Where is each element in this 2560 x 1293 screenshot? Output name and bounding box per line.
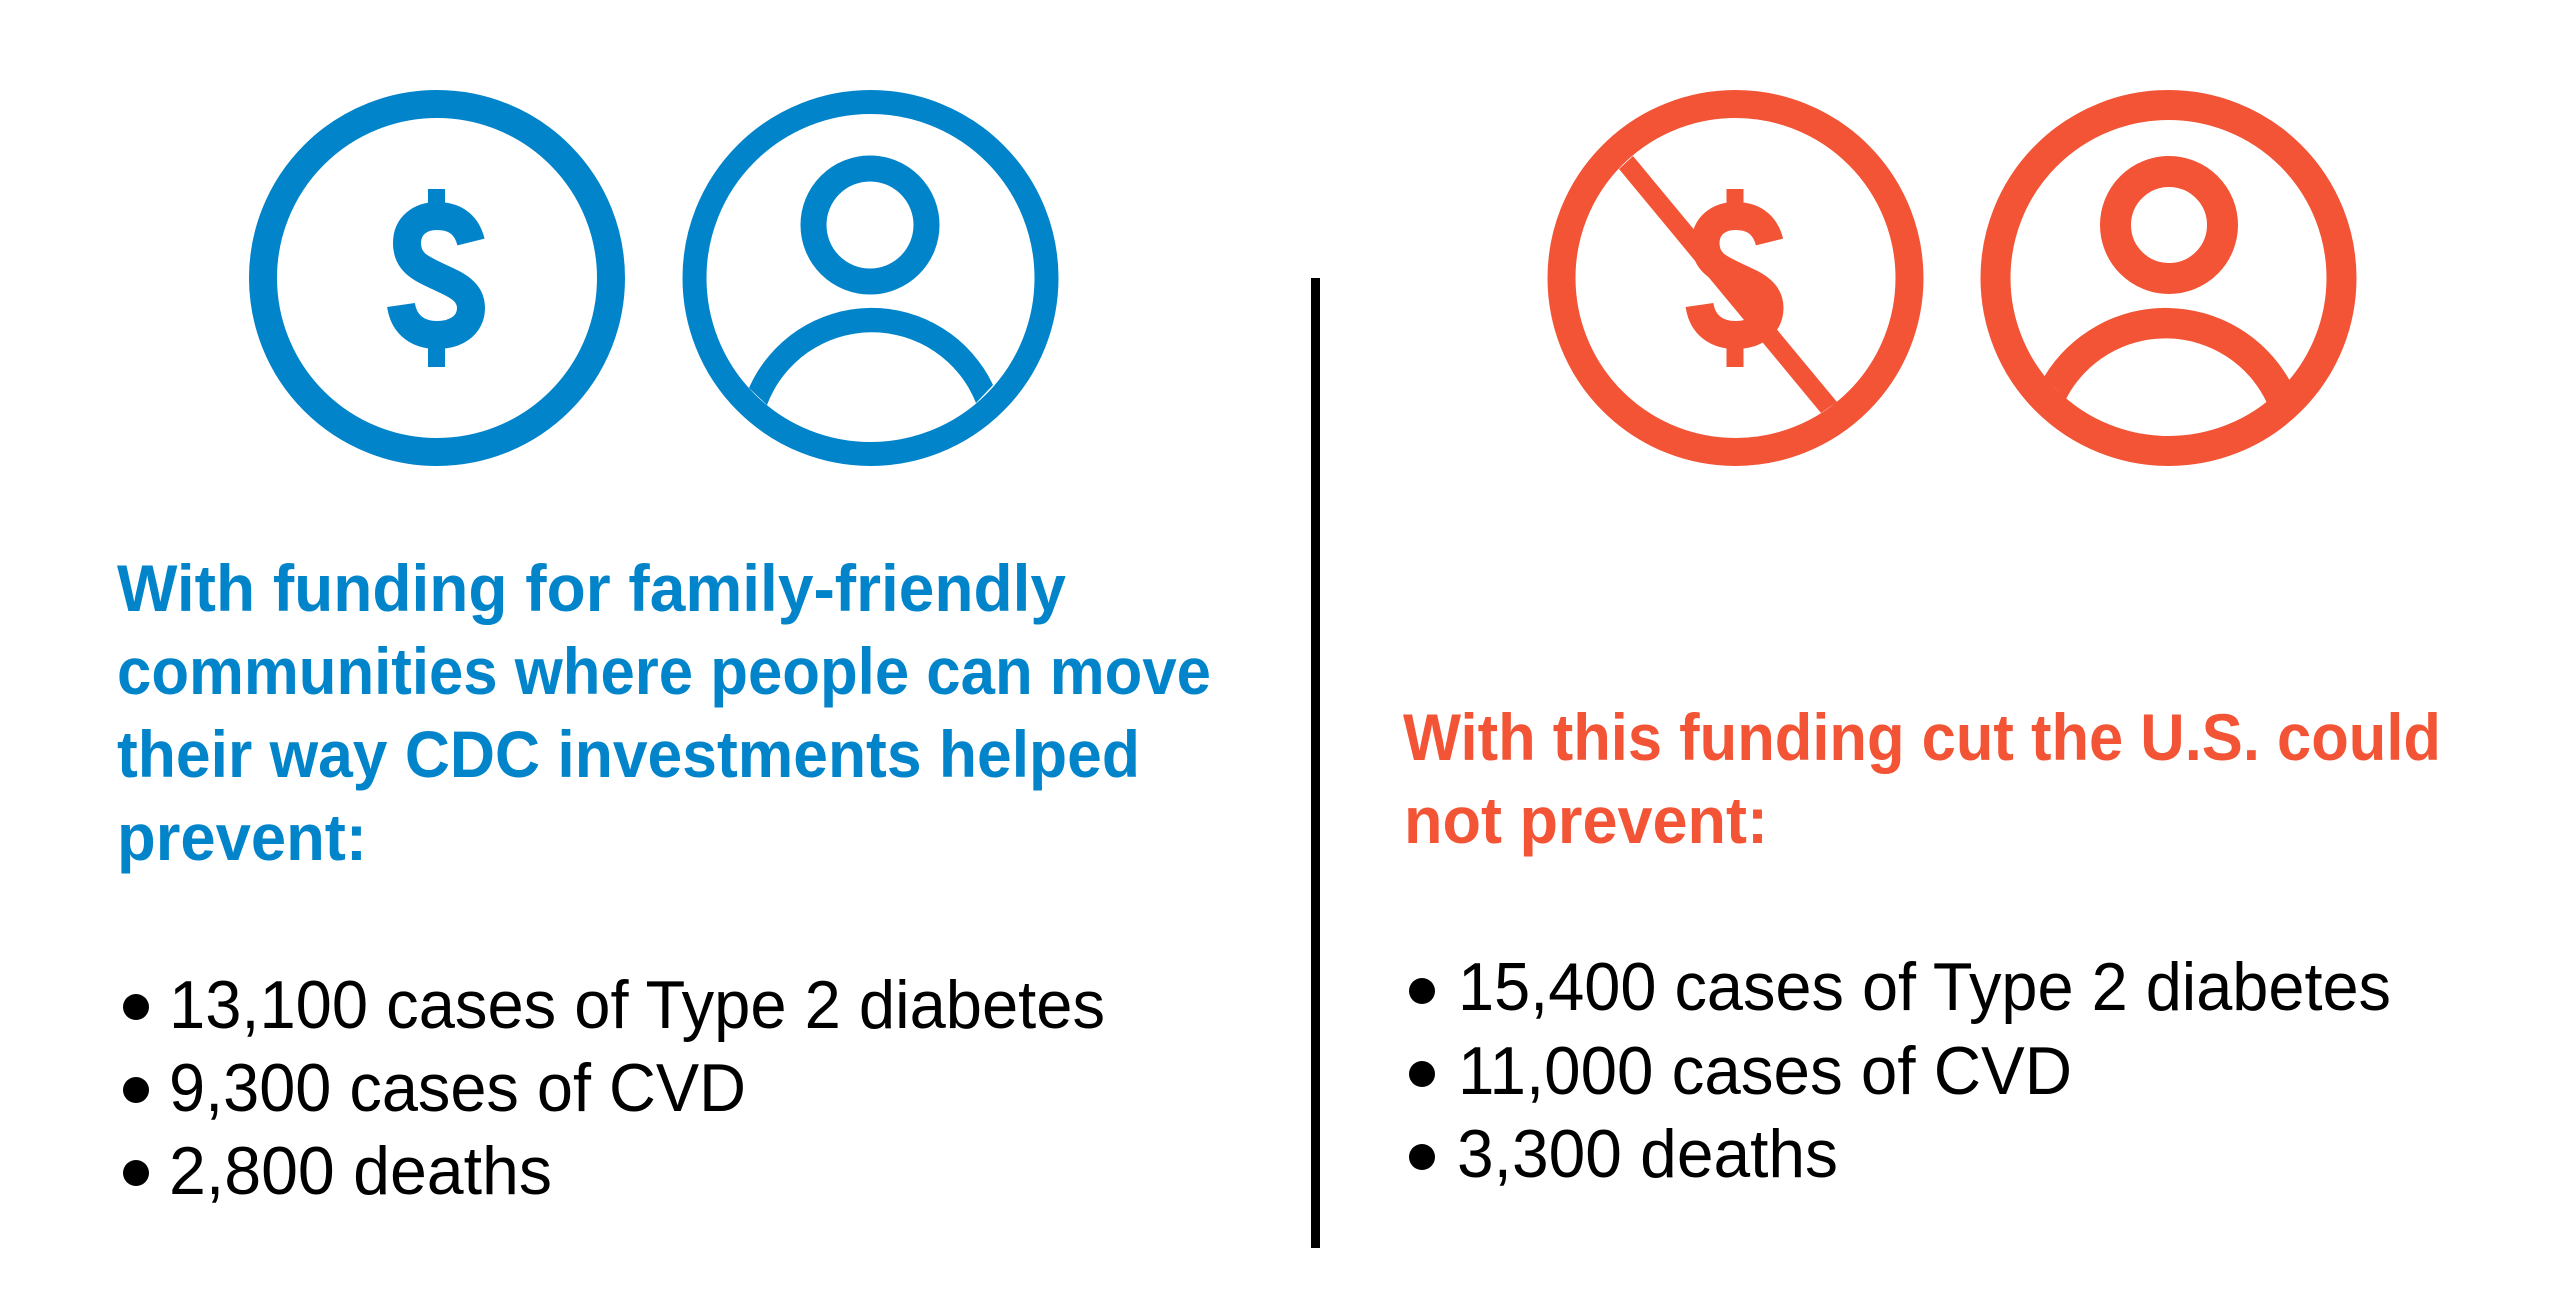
- heading: red right column: [1403, 700, 2441, 857]
- list: right column statistics: 3,300 deaths: [1457, 1116, 1838, 1192]
- list: left column statistics: 2,800 deaths: [169, 1133, 552, 1209]
- icon: red crossed-out dollar coin: [1562, 104, 1910, 452]
- heading: blue left column: With funding for family-friendly: [117, 551, 1066, 625]
- heading: blue left column: communities where people can move: [117, 634, 1211, 708]
- list: left column statistics: 13,100 cases of Type 2 diabetes: [169, 967, 1105, 1043]
- list: right column statistics: [1409, 949, 2391, 1192]
- heading: blue left column: their way CDC investments helped: [117, 717, 1140, 791]
- icon: blue dollar coin: [263, 104, 611, 452]
- list: left column statistics: 9,300 cases of CVD: [169, 1050, 746, 1126]
- heading: red right column: With this funding cut the U.S. could: [1403, 700, 2441, 774]
- list: right column statistics: 11,000 cases of CVD: [1458, 1033, 2072, 1109]
- divider: vertical line: [1311, 278, 1320, 1248]
- heading: blue left column: prevent:: [117, 800, 367, 874]
- list: left column statistics: [123, 967, 1105, 1209]
- heading: blue left column: [117, 551, 1211, 874]
- heading: red right column: not prevent:: [1404, 783, 1768, 857]
- icon: red person: [1996, 105, 2342, 451]
- list: right column statistics: 15,400 cases of Type 2 diabetes: [1458, 949, 2391, 1025]
- icon: blue person: [694, 102, 1046, 454]
